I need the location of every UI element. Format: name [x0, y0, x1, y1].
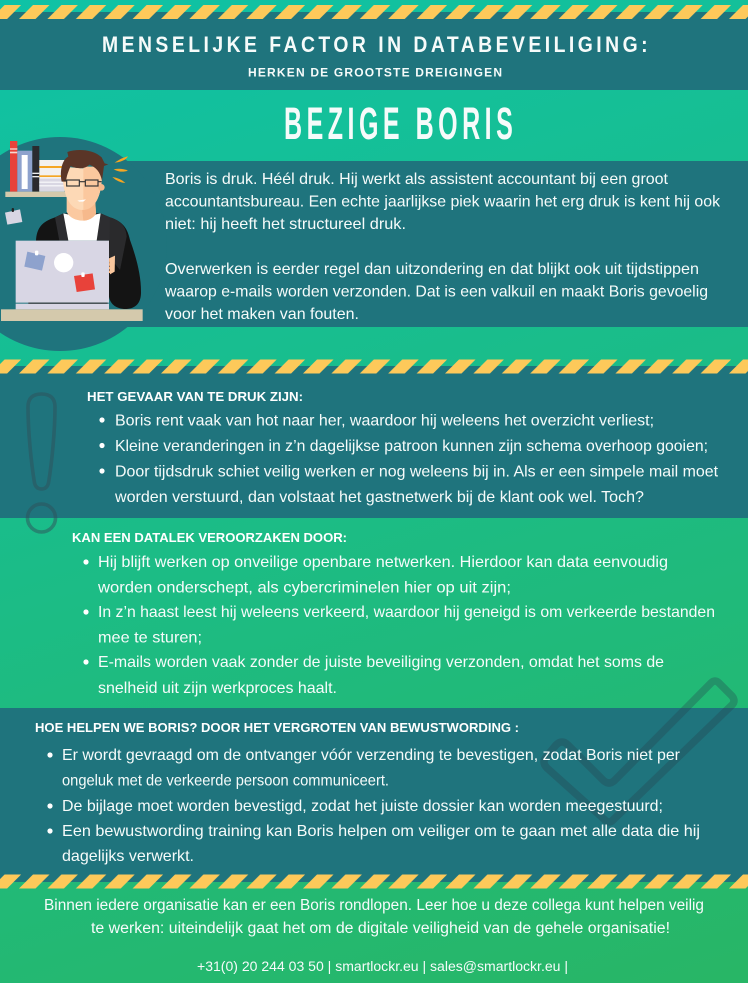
desk — [1, 309, 143, 321]
text block: closing message: Binnen iedere organisatie kan er een Boris rondlopen. Leer hoe u deze collega kunt helpen veilig — [44, 897, 704, 914]
shirt — [63, 213, 101, 241]
header subtitle: HERKEN DE GROOTSTE DREIGINGEN — [248, 66, 502, 80]
text block: solution list: Er wordt gevraagd om de ontvanger vóór verzending te bevestigen, zodat Boris niet per — [62, 747, 680, 764]
text block: data leak list: snelheid uit zijn werkproces haalt. — [98, 680, 337, 697]
icon: check mark watermark — [544, 681, 734, 822]
heading: danger: HET GEVAAR VAN TE DRUK ZIJN: — [87, 389, 303, 404]
illustration: Boris at his laptop — [1, 141, 143, 321]
panel: header band — [0, 12, 748, 90]
text block: danger list: worden verstuurd, dan volstaat het gastnetwerk bij de klant ook wel. Toch? — [114, 489, 644, 506]
icon: circle behind character — [0, 137, 167, 351]
heading: solution: HOE HELPEN WE BORIS? DOOR HET VERGROTEN VAN BEWUSTWORDING : — [35, 720, 519, 735]
text block: closing message: te werken: uiteindelijk gaat het om de digitale veiligheid van de gehele organisatie! — [91, 920, 670, 937]
hair — [61, 150, 108, 182]
text block: danger list: Kleine veranderingen in z’n dagelijkse patroon kunnen zijn schema overhoop gooien; — [115, 438, 708, 455]
text block: solution list: ongeluk met de verkeerde persoon communiceert. — [62, 772, 389, 790]
text block: intro — [164, 171, 720, 323]
text block: data leak list: worden onderschept, als cybercriminelen hier op uit zijn; — [97, 580, 511, 596]
heading: Bezige Boris: BEZIGE BORIS — [284, 98, 513, 149]
text block: intro: Overwerken is eerder regel dan uitzondering en dat blijkt ook uit tijdstippen — [165, 261, 699, 278]
text block: solution list — [35, 720, 700, 865]
text block: solution list: dagelijks verwerkt. — [62, 848, 194, 865]
face — [63, 167, 102, 210]
text block: danger list — [87, 389, 719, 506]
text block: danger list: Door tijdsdruk schiet veilig werken er nog weleens bij in. Als er een simpele mail moet — [115, 464, 719, 480]
bullets: solution — [47, 752, 53, 834]
text block: solution list: De bijlage moet worden bevestigd, zodat het juiste dossier kan worden meegestuurd; — [62, 798, 663, 815]
hazard stripe: top — [0, 5, 748, 19]
text block: data leak list: mee te sturen; — [98, 630, 202, 646]
text block: intro: voor het maken van fouten. — [165, 306, 359, 323]
panel: solution section — [0, 708, 748, 882]
hazard stripe: bottom — [0, 874, 748, 888]
panel: danger section — [0, 366, 748, 518]
panel: intro band — [122, 161, 748, 327]
text block: closing message — [44, 897, 704, 937]
icon: books on shelf — [5, 141, 69, 197]
bullets: data leak — [83, 559, 89, 665]
text block: data leak list: E-mails worden vaak zonder de juiste beveiliging verzonden, omdat het soms de — [98, 654, 664, 671]
bullets: danger — [99, 417, 105, 474]
glasses — [64, 180, 102, 186]
text block: data leak list: In z’n haast leest hij weleens verkeerd, waardoor hij geneigd is om verkeerde bestanden — [98, 604, 715, 621]
text block: intro: Boris is druk. Héél druk. Hij werkt als assistent accountant bij een groot — [165, 171, 669, 188]
icon: laptop — [16, 241, 109, 309]
hazard stripe: middle — [0, 360, 748, 374]
text block: danger list: Boris rent vaak van hot naar her, waardoor hij weleens het overzicht verliest; — [115, 412, 654, 430]
icon: exclamation mark watermark — [28, 394, 56, 532]
text block: intro: waarop e-mails worden verzonden. Dat is een valkuil en maakt Boris gevoelig — [164, 284, 708, 300]
contact line: +31(0) 20 244 03 50 | smartlockr.eu | sales@smartlockr.eu | — [197, 959, 568, 975]
text block: data leak list: Hij blijft werken op onveilige openbare netwerken. Hierdoor kan data eenvoudig — [98, 554, 668, 571]
icon: wall note — [5, 208, 22, 225]
neck — [67, 197, 96, 221]
text block: intro: niet: hij heeft het structureel druk. — [165, 216, 406, 233]
icon: stress marks — [112, 156, 128, 183]
text block: solution list: Een bewustwording training kan Boris helpen om veiliger om te gaan met alle data die hij — [62, 823, 700, 840]
header title: MENSELIJKE FACTOR IN DATABEVEILIGING: — [102, 33, 648, 57]
hand — [109, 256, 115, 274]
text block: data leak list — [72, 530, 715, 697]
text block: intro: accountantsbureau. Een echte jaarlijkse piek waarin het erg druk is kent hij ook — [165, 194, 720, 210]
heading: data leak: KAN EEN DATALEK VEROORZAKEN DOOR: — [72, 530, 347, 545]
body and jacket — [36, 213, 141, 309]
